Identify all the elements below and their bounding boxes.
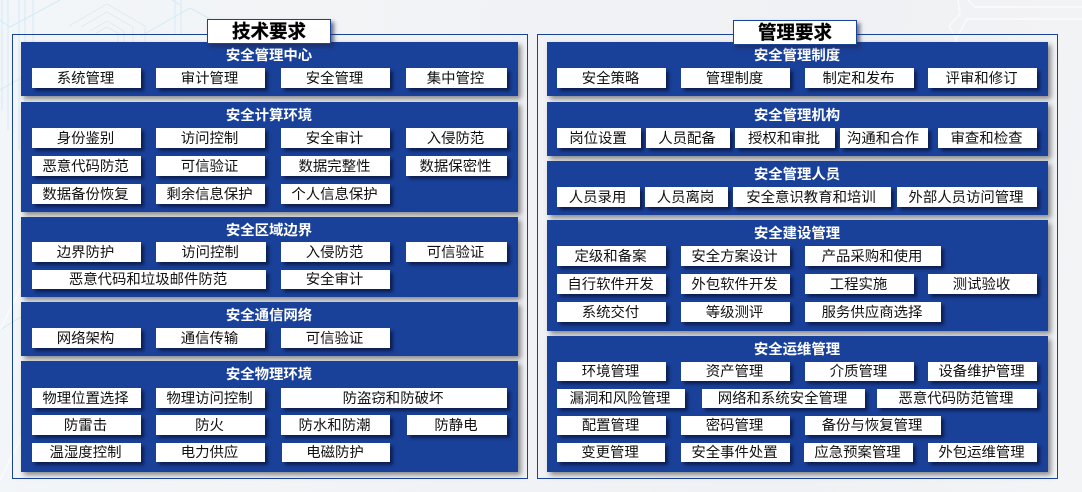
- panel: 安全区域边界: 恶意代码和垃圾邮件防范: [69, 272, 227, 288]
- panel: 安全建设管理: [547, 220, 1048, 331]
- panel: 安全管理机构: [547, 102, 1048, 156]
- panel: 安全建设管理: 服务供应商选择: [822, 305, 922, 321]
- panel: 安全管理中心: 安全管理中心: [226, 48, 312, 64]
- panel: 安全物理环境: 安全物理环境: [226, 367, 312, 383]
- panel: 安全区域边界: 安全区域边界: [226, 223, 312, 239]
- panel: 安全管理机构: 授权和审批: [748, 131, 820, 147]
- panel: 安全物理环境: 防火: [195, 418, 224, 434]
- panel: 安全区域边界: 可信验证: [427, 245, 484, 261]
- panel: 安全区域边界: 入侵防范: [306, 245, 363, 261]
- panel: 安全管理制度: 制定和发布: [823, 71, 894, 87]
- panel: 安全管理人员: 人员离岗: [657, 190, 714, 206]
- panel: 安全通信网络: 安全通信网络: [226, 308, 312, 324]
- panel: 安全计算环境: 剩余信息保护: [166, 187, 253, 203]
- panel: 安全管理机构: 人员配备: [658, 131, 716, 147]
- heading: 管理要求: [733, 20, 857, 45]
- panel: 安全运维管理: 恶意代码防范管理: [898, 391, 1014, 407]
- panel: 安全管理人员: 安全意识教育和培训: [746, 190, 876, 206]
- panel: 安全物理环境: 防水和防潮: [299, 418, 370, 434]
- panel: 安全建设管理: 系统交付: [582, 305, 639, 321]
- panel: 安全计算环境: 可信验证: [181, 159, 238, 175]
- panel: 安全管理中心: [21, 42, 518, 96]
- panel: 安全管理机构: 审查和检查: [951, 131, 1022, 147]
- panel: 安全管理人员: [547, 161, 1048, 215]
- panel: 安全物理环境: 电力供应: [181, 445, 238, 461]
- panel: 安全运维管理: 应急预案管理: [814, 445, 901, 461]
- panel: 管理要求 frame: [537, 34, 1058, 479]
- panel: 安全区域边界: 安全审计: [306, 272, 363, 288]
- panel: 安全物理环境: 温湿度控制: [50, 445, 121, 461]
- panel: 安全物理环境: 防盗窃和防破坏: [343, 391, 443, 407]
- panel: 安全运维管理: 备份与恢复管理: [822, 418, 922, 434]
- panel: 安全计算环境: 安全审计: [306, 131, 363, 147]
- panel: 安全管理机构: 沟通和合作: [847, 131, 919, 147]
- panel: 安全建设管理: 安全方案设计: [691, 249, 778, 265]
- panel: 安全管理中心: 审计管理: [181, 71, 238, 87]
- heading: 管理要求: 管理要求: [758, 22, 832, 43]
- panel: 安全运维管理: 安全事件处置: [691, 445, 778, 461]
- panel: 安全建设管理: 定级和备案: [575, 249, 646, 265]
- panel: 安全物理环境: 防雷击: [64, 418, 107, 434]
- panel: 安全管理人员: 外部人员访问管理: [908, 190, 1024, 206]
- panel: 安全计算环境: 数据完整性: [299, 159, 370, 175]
- panel: 安全建设管理: 等级测评: [706, 305, 763, 321]
- panel: 安全通信网络: 网络架构: [57, 331, 114, 347]
- panel: 技术要求 frame: [12, 34, 528, 479]
- panel: 安全区域边界: 边界防护: [57, 245, 114, 261]
- panel: 安全建设管理: 产品采购和使用: [822, 249, 922, 265]
- panel: 安全计算环境: 恶意代码防范: [42, 159, 129, 175]
- panel: 安全运维管理: [547, 336, 1048, 472]
- panel: 安全物理环境: [21, 361, 518, 472]
- panel: 安全计算环境: 个人信息保护: [291, 187, 378, 203]
- panel: 安全运维管理: 设备维护管理: [938, 364, 1025, 380]
- panel: 安全管理中心: 系统管理: [57, 71, 114, 87]
- panel: 安全物理环境: 防静电: [434, 418, 478, 434]
- panel: 安全运维管理: 配置管理: [582, 418, 639, 434]
- panel: 安全物理环境: 物理访问控制: [166, 391, 253, 407]
- panel: 安全管理中心: 集中管控: [427, 71, 484, 87]
- panel: 安全运维管理: 变更管理: [581, 445, 639, 461]
- panel: 安全管理机构: 岗位设置: [569, 131, 627, 147]
- panel: 安全管理制度: 评审和修订: [946, 71, 1017, 87]
- panel: 安全区域边界: 访问控制: [181, 245, 239, 261]
- panel: 安全物理环境: 电磁防护: [306, 445, 364, 461]
- panel: 安全建设管理: 外包软件开发: [691, 277, 778, 293]
- panel: 安全管理制度: 安全策略: [582, 71, 639, 87]
- panel: 安全管理制度: 管理制度: [706, 71, 763, 87]
- panel: 安全计算环境: 数据保密性: [420, 159, 491, 175]
- panel: 安全运维管理: 资产管理: [706, 364, 763, 380]
- panel: 安全计算环境: 访问控制: [181, 131, 238, 147]
- panel: 安全通信网络: 可信验证: [306, 331, 363, 347]
- panel: 安全建设管理: 测试验收: [953, 277, 1010, 293]
- panel: 安全管理制度: [547, 42, 1048, 96]
- panel: 安全建设管理: 工程实施: [830, 277, 887, 293]
- panel: 安全管理人员: 人员录用: [569, 190, 626, 206]
- panel: 安全计算环境: 安全计算环境: [226, 108, 312, 124]
- panel: 安全运维管理: 外包运维管理: [938, 445, 1025, 461]
- panel: 安全运维管理: 密码管理: [706, 418, 763, 434]
- panel: 安全管理人员: 安全管理人员: [754, 167, 840, 183]
- panel: 安全计算环境: [21, 102, 518, 212]
- panel: 安全区域边界: [21, 217, 518, 297]
- panel: 安全物理环境: 物理位置选择: [42, 391, 129, 407]
- heading: 技术要求: 技术要求: [232, 21, 306, 42]
- panel: 安全建设管理: 安全建设管理: [754, 226, 840, 242]
- panel: 安全通信网络: 通信传输: [181, 331, 238, 347]
- panel: 安全建设管理: 自行软件开发: [567, 277, 654, 293]
- panel: 安全运维管理: 介质管理: [830, 364, 887, 380]
- panel: 安全管理制度: 安全管理制度: [754, 48, 840, 64]
- panel: 安全计算环境: 入侵防范: [427, 131, 484, 147]
- panel: 安全管理中心: 安全管理: [306, 71, 363, 87]
- panel: 安全运维管理: 漏洞和风险管理: [570, 391, 670, 407]
- panel: 安全运维管理: 安全运维管理: [754, 342, 840, 358]
- panel: 安全运维管理: 网络和系统安全管理: [718, 391, 847, 407]
- heading: 技术要求: [207, 19, 331, 44]
- panel: 安全管理机构: 安全管理机构: [754, 108, 840, 124]
- panel: 安全计算环境: 数据备份恢复: [42, 187, 129, 203]
- panel: 安全通信网络: [21, 302, 518, 356]
- panel: 安全运维管理: 环境管理: [582, 364, 639, 380]
- panel: 安全计算环境: 身份鉴别: [57, 131, 114, 147]
